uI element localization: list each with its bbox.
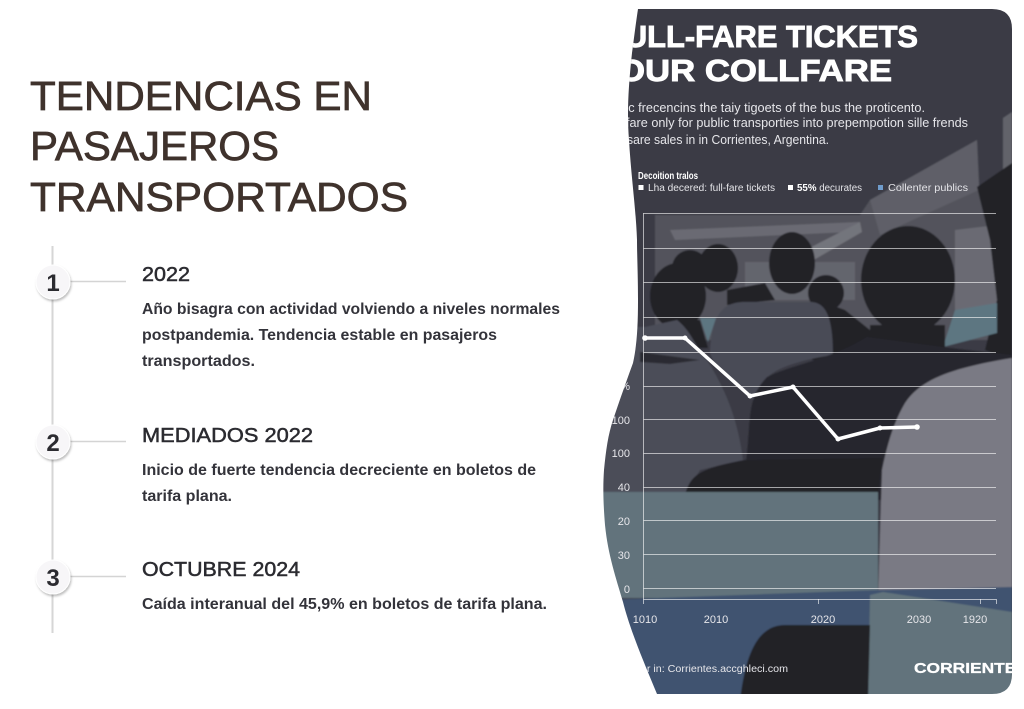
poster footer bbox=[646, 662, 1012, 674]
title bbox=[30, 73, 408, 220]
y axis labels: 100 bbox=[612, 448, 630, 460]
poster heading bbox=[629, 25, 918, 82]
step 1: postpandemia. Tendencia estable en pasajeros bbox=[142, 327, 497, 344]
heads bbox=[650, 226, 955, 360]
step 3: OCTUBRE 2024 bbox=[142, 559, 300, 581]
step 1 bbox=[36, 264, 560, 370]
poster paragraph: sare sales in in Corrientes, Argentina. bbox=[627, 132, 829, 147]
y axis labels: % bbox=[620, 381, 630, 393]
step 2: tarifa plana. bbox=[142, 488, 232, 505]
poster paragraph: Public frecencins the taiy tigoets of the bus the proticento. bbox=[600, 100, 925, 115]
title: TENDENCIAS EN bbox=[30, 73, 372, 119]
y axis labels: 0 bbox=[624, 584, 630, 596]
x axis labels: 2020 bbox=[811, 614, 835, 626]
poster heading: FULL-FARE TICKETS bbox=[606, 19, 918, 54]
poster footer: CORRIENTES bbox=[914, 660, 1024, 677]
step 2: MEDIADOS 2022 bbox=[142, 425, 313, 447]
x axis labels: 2010 bbox=[704, 614, 728, 626]
x axis labels: 1010 bbox=[633, 614, 657, 626]
x axis labels: 1920 bbox=[963, 614, 987, 626]
step 3: 3 bbox=[46, 565, 60, 592]
window area bbox=[654, 190, 989, 340]
step 3 bbox=[36, 559, 547, 613]
chart legend: Lha decered: full-fare tickets bbox=[648, 183, 775, 194]
y axis labels: 30 bbox=[618, 550, 630, 562]
chart legend: Decoition tralos bbox=[638, 171, 698, 182]
data line bbox=[642, 335, 920, 442]
poster paragraph bbox=[628, 102, 968, 146]
poster footer: Order in: Corrientes.accghleci.com bbox=[623, 664, 788, 675]
chart legend: 55% decurates bbox=[797, 183, 862, 194]
y axis labels: 40 bbox=[618, 482, 630, 494]
x axis labels bbox=[634, 616, 987, 623]
title: TRANSPORTADOS bbox=[30, 174, 408, 220]
seats bbox=[710, 302, 833, 403]
y axis labels bbox=[612, 381, 630, 596]
y axis labels: 100 bbox=[612, 415, 630, 427]
photo background bbox=[600, 0, 1020, 709]
line chart bbox=[612, 213, 996, 626]
timeline bbox=[36, 246, 560, 633]
step 1: transportados. bbox=[142, 353, 255, 370]
step 1: 2022 bbox=[142, 264, 190, 286]
step 1: Año bisagra con actividad volviendo a niveles normales bbox=[142, 301, 560, 318]
step 1: 1 bbox=[46, 270, 60, 297]
poster paragraph: fare only for public transporties into prepempotion sille frends bbox=[626, 115, 968, 130]
title: PASAJEROS bbox=[30, 123, 279, 169]
panel: bus photo poster bbox=[600, 0, 1024, 709]
step 2: 2 bbox=[46, 430, 60, 457]
chart legend bbox=[638, 171, 968, 194]
step 2 bbox=[36, 425, 536, 505]
y axis labels: 20 bbox=[618, 516, 630, 528]
step 3: Caída interanual del 45,9% en boletos de tarifa plana. bbox=[142, 596, 547, 613]
lower colour fields bbox=[600, 492, 878, 598]
x axis labels: 2030 bbox=[907, 614, 931, 626]
poster heading: OUR COLLFARE bbox=[618, 53, 892, 88]
chart legend: Collenter publics bbox=[888, 183, 968, 194]
step 2: Inicio de fuerte tendencia decreciente en boletos de bbox=[142, 462, 536, 479]
